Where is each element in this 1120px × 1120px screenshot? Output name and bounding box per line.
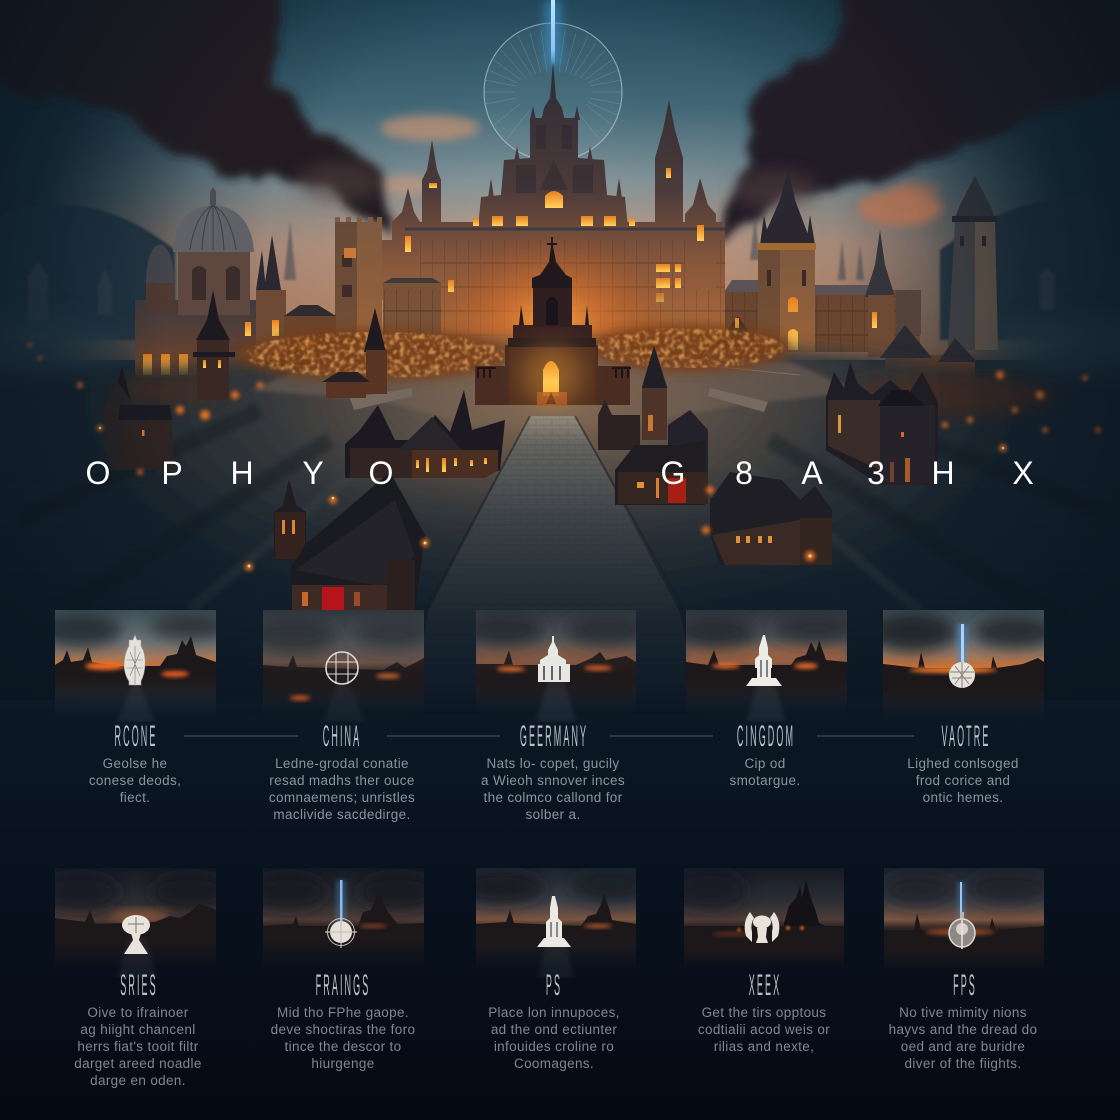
left small tower	[193, 290, 235, 400]
castle windows	[405, 168, 704, 302]
edge vignette	[0, 0, 1120, 700]
card: Ps	[476, 868, 636, 977]
text: Frings: hiurgenge	[311, 1056, 375, 1071]
text: Sries: darget areed noadle	[74, 1056, 202, 1071]
text: China: Ledne-grodal conatie	[275, 756, 409, 771]
text: Kingdom: smotargue.	[729, 773, 801, 788]
text: Vaotre	[907, 756, 1019, 805]
plaza raised terrace	[250, 352, 860, 425]
heading: Sries: SRIES	[120, 968, 158, 1002]
text: Xeex	[698, 1005, 830, 1054]
text: China: resad madhs ther ouce	[269, 773, 415, 788]
text: Sries: ag hiight chancenl	[80, 1022, 196, 1037]
text: China: comnaemens; unristles	[269, 790, 415, 805]
text: China	[269, 756, 415, 822]
heading: Frings: FRAINGS	[316, 968, 370, 1002]
text: Fps: hayvs and the dread do	[889, 1022, 1037, 1037]
text: Xeex: codtialii acod weis or	[698, 1022, 830, 1037]
text: Xeex: rilias and nexte,	[714, 1039, 814, 1054]
right manor	[826, 362, 938, 485]
text: Ps: ad the ond ectiunter	[491, 1022, 617, 1037]
main castle	[375, 62, 725, 347]
text: Germany: the colmco callond for	[483, 790, 623, 805]
heading: Ps: PS	[546, 968, 562, 1002]
text: China: maclivide sacdedirge.	[273, 807, 411, 822]
heading: Kingdom: CINGDOM	[737, 719, 795, 753]
text: Rcone: Geolse he	[103, 756, 167, 771]
icon: monument	[746, 635, 782, 686]
icon: lattice globe	[326, 652, 358, 684]
connector lines	[184, 735, 914, 737]
card: Vaotre	[883, 610, 1044, 708]
text: Germany: solber a.	[526, 807, 580, 822]
text: Kingdom: Cip od	[744, 756, 786, 771]
text: Ps: infouides croline ro	[494, 1039, 614, 1054]
heading: Fps: FPS	[953, 968, 977, 1002]
diagonal road lines	[20, 410, 1120, 620]
text: Sries	[74, 1005, 202, 1088]
hero illustration: castle city	[0, 0, 1120, 648]
icon: temple	[538, 636, 570, 682]
icon: round emblem	[949, 662, 975, 688]
row 1	[38, 610, 1057, 822]
text: Sries: herrs fiat's tooit filtr	[77, 1039, 199, 1054]
icon: compass emblem	[325, 916, 357, 948]
text: Rcone: fiect.	[120, 790, 150, 805]
scattered fire lights	[28, 343, 1101, 571]
hero title letters: G8A3HX	[661, 455, 1034, 491]
text: Germany	[481, 756, 625, 822]
fire crowds	[115, 324, 1055, 417]
text: Frings: Mid tho FPhe gaope.	[277, 1005, 409, 1020]
left buildings	[135, 187, 441, 378]
heading: China: CHINA	[323, 719, 361, 753]
text: Fps: diver of the fiights.	[905, 1056, 1021, 1071]
text: Fps: No tive mimity nions	[899, 1005, 1027, 1020]
text: Sries: darge en oden.	[90, 1073, 186, 1088]
centre left house group	[345, 390, 505, 478]
text: Ps	[488, 1005, 620, 1071]
text: Rcone: conese deods,	[89, 773, 181, 788]
icon: tower	[537, 896, 571, 947]
castle details	[516, 125, 593, 193]
heading: Germany: GEERMANY	[520, 719, 588, 753]
distant hills	[0, 192, 1120, 340]
text: Frings: deve shoctiras the foro	[271, 1022, 415, 1037]
far spires	[26, 218, 1056, 320]
text: Sries: Oive to ifrainoer	[87, 1005, 189, 1020]
text: Frings: tince the descor to	[285, 1039, 401, 1054]
central stone road	[425, 416, 684, 633]
text: Ps: Coomagens.	[514, 1056, 594, 1071]
front left house	[274, 472, 425, 611]
text: Xeex: Get the tirs opptous	[702, 1005, 826, 1020]
text: Kingdom	[729, 756, 801, 788]
text: Vaotre: frod corice and	[916, 773, 1010, 788]
front gate tower	[475, 237, 631, 406]
heading: Rcone: RCONE	[115, 719, 157, 753]
central fire glow	[432, 230, 672, 420]
icon: urn	[124, 635, 145, 685]
icon: shield emblem	[949, 912, 975, 949]
text: Ps: Place lon innupoces,	[488, 1005, 620, 1020]
left cluster house	[103, 366, 175, 470]
card: China	[263, 610, 424, 720]
front right house	[710, 472, 832, 565]
text: Rcone	[89, 756, 181, 805]
card: Rcone	[55, 610, 216, 722]
text: Germany: Nats lo- copet, gucily	[486, 756, 620, 771]
text: Fps	[889, 1005, 1037, 1071]
hero title letters	[86, 455, 1034, 491]
text: Germany: a Wieoh snnover inces	[481, 773, 625, 788]
card: Kingdom	[686, 610, 847, 722]
card: Sries	[55, 868, 216, 977]
smoke plume left, lit underside	[298, 162, 382, 202]
card: Germany	[476, 610, 636, 722]
hero title letters: OPHYO	[86, 455, 393, 491]
smoke cloud right	[718, 0, 1120, 240]
halo circle with beam	[484, 0, 622, 161]
text: Vaotre: ontic hemes.	[923, 790, 1003, 805]
text: Frings	[271, 1005, 415, 1071]
small tower near gate left	[322, 308, 387, 398]
smoke cloud left	[0, 0, 392, 240]
card: Xeex	[684, 868, 844, 962]
centre right towers	[598, 346, 708, 505]
arch light	[522, 345, 582, 405]
card: Fps	[884, 868, 1044, 964]
row 2	[40, 868, 1051, 1088]
icon: winged creature	[745, 912, 779, 943]
right buildings	[714, 170, 998, 395]
plaza ground	[133, 329, 978, 588]
card: Frings	[263, 868, 424, 958]
heading: Vaotre: VAOTRE	[942, 719, 990, 753]
sky	[62, 0, 1036, 360]
text: Vaotre: Lighed conlsoged	[907, 756, 1019, 771]
heading: Xeex: XEEX	[749, 968, 781, 1002]
side mist	[0, 317, 1120, 373]
text: Fps: oed and are buridre	[901, 1039, 1025, 1054]
smoke plume right, lit underside	[733, 170, 817, 210]
icon: chalice	[122, 915, 150, 954]
